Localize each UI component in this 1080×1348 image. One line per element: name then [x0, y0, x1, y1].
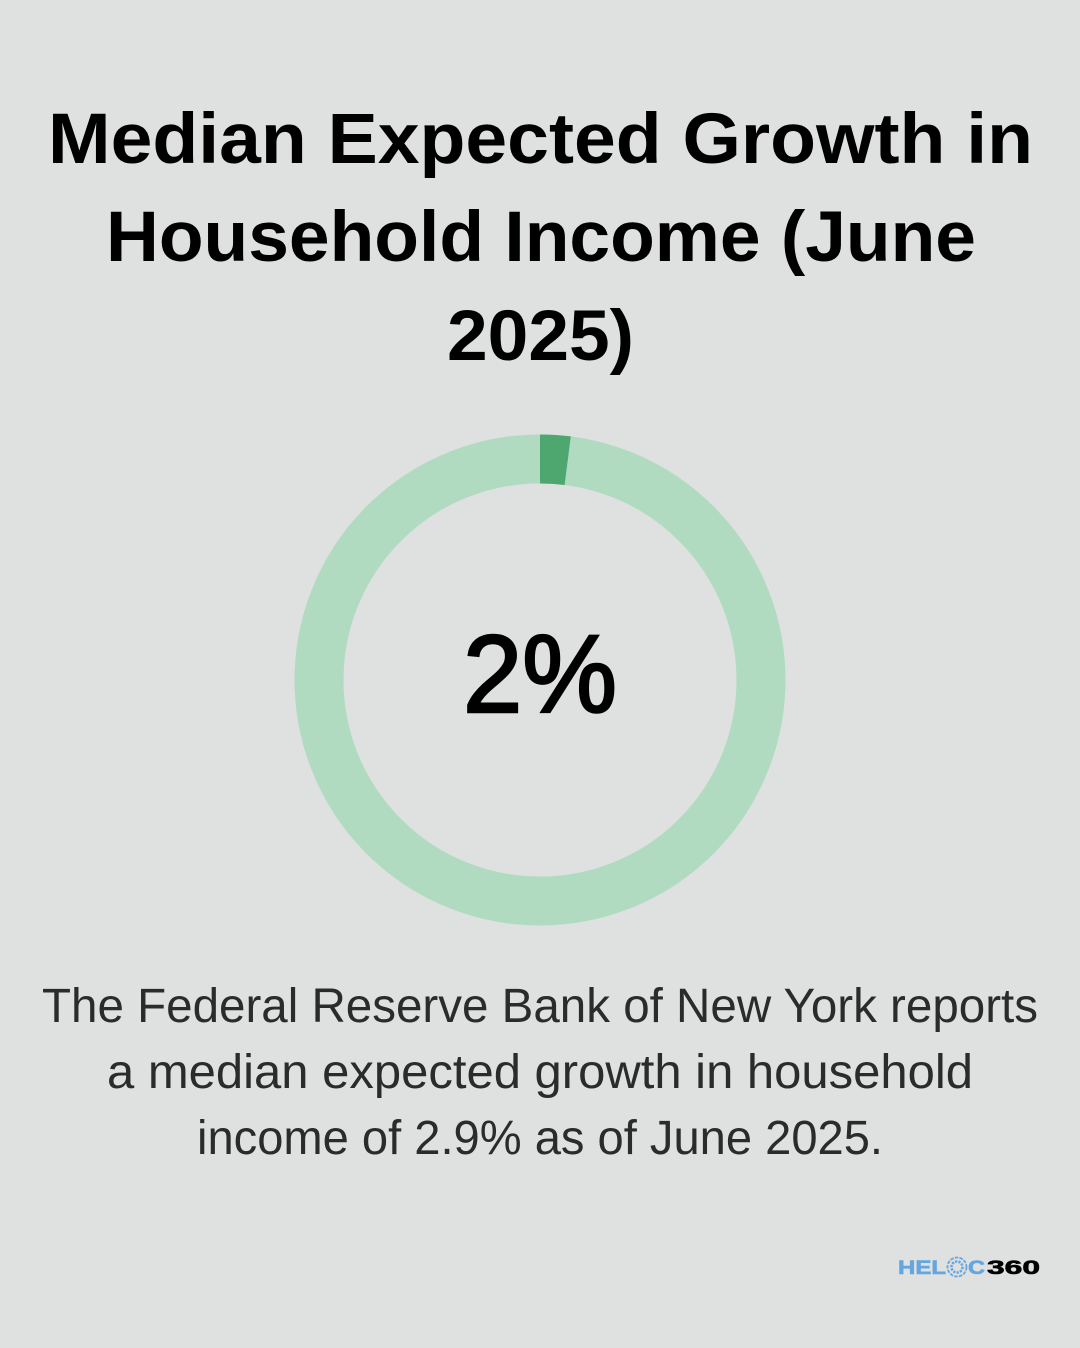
- logo: HELOC360: HEL: [898, 1258, 946, 1279]
- ring value segment: [540, 434, 571, 485]
- donut chart: 2%: [319, 434, 761, 901]
- description text: [42, 980, 1038, 1165]
- ring track: [319, 459, 761, 901]
- icon: logo spiral: [948, 1258, 966, 1276]
- title: Median Expected Growth in: [48, 100, 1033, 179]
- logo: HELOC360: C: [968, 1258, 985, 1279]
- title: [48, 100, 1033, 376]
- logo: HELOC360: 360: [987, 1258, 1040, 1279]
- description text: income of 2.9% as of June 2025.: [197, 1112, 883, 1165]
- center value: 2%: [463, 613, 617, 736]
- logo: HELOC360: [898, 1258, 1040, 1279]
- description text: a median expected growth in household: [107, 1046, 973, 1099]
- description text: The Federal Reserve Bank of New York reports: [42, 980, 1038, 1033]
- title: 2025): [447, 297, 634, 376]
- title: Household Income (June: [106, 198, 976, 277]
